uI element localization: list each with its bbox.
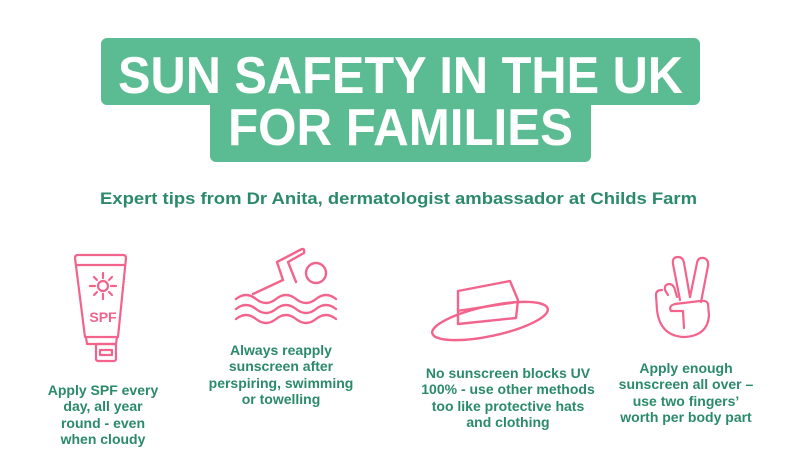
caption 2: or towelling (242, 391, 320, 407)
caption 1: day, all year (63, 398, 143, 414)
title (101, 38, 700, 162)
caption 4 (619, 360, 754, 425)
icon: sunscreen tube: SPF (89, 309, 117, 325)
caption 1: round - even (61, 415, 145, 431)
caption 4: use two fingers’ (633, 393, 739, 409)
title: FOR FAMILIES (228, 99, 573, 157)
caption 1 (48, 382, 158, 447)
caption 1: Apply SPF every (48, 382, 158, 398)
title: SUN SAFETY IN THE UK (118, 47, 683, 105)
icon: sunscreen tube (75, 255, 126, 361)
caption 4: worth per body part (619, 409, 752, 425)
icon: hat (429, 281, 551, 348)
caption 2: sunscreen after (229, 358, 334, 374)
caption 3: too like protective hats (432, 398, 584, 414)
caption 2 (209, 342, 353, 407)
icon: swimmer (236, 249, 336, 323)
caption 3: 100% - use other methods (421, 381, 595, 397)
icon: peace hand (656, 257, 709, 337)
caption 3: and clothing (466, 414, 550, 430)
caption 4: Apply enough (639, 360, 733, 376)
caption 3 (421, 365, 595, 430)
caption 4: sunscreen all over – (619, 376, 754, 392)
caption 1: when cloudy (60, 431, 146, 447)
caption 2: perspiring, swimming (209, 375, 353, 391)
caption 3: No sunscreen blocks UV (426, 365, 591, 381)
caption 2: Always reapply (230, 342, 332, 358)
subtitle: Expert tips from Dr Anita, dermatologist ambassador at Childs Farm (100, 189, 697, 208)
